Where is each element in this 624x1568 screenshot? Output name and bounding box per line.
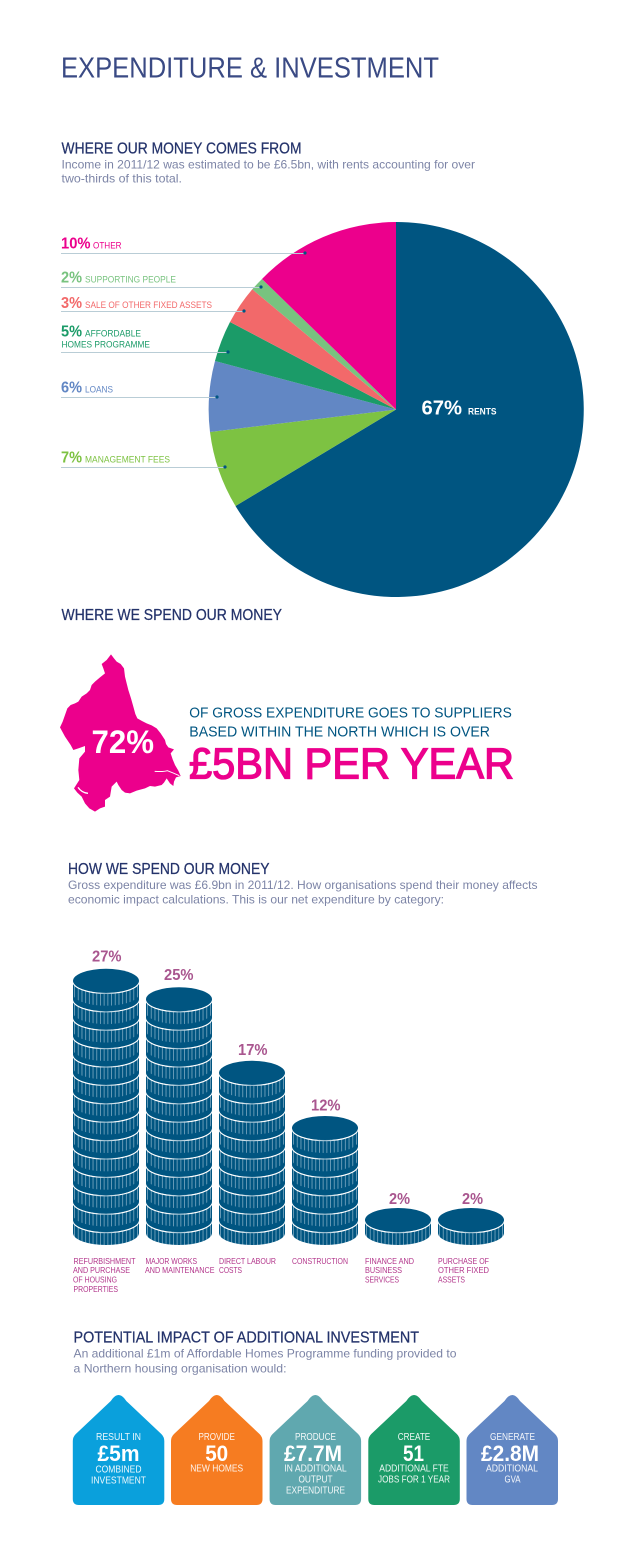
chart: coin stacks (73, 949, 504, 1245)
stat: 72%: 72% (92, 724, 154, 760)
category label: major works (145, 1256, 215, 1275)
category label: direct labour: COSTS (219, 1265, 242, 1275)
house: £2.8m additional GVA: GENERATE (490, 1432, 535, 1443)
pie label: management fees: MANAGEMENT FEES (85, 455, 170, 466)
pie label: affordable homes programme: 5% (61, 324, 82, 341)
house: £7.7m output expenditure: EXPENDITURE (286, 1486, 345, 1497)
text block: gross expenditure intro (68, 878, 538, 906)
category label: major works: AND MAINTENANCE (145, 1265, 215, 1275)
category label: fixed assets: OTHER FIXED (438, 1265, 489, 1275)
pie label: loans: LOANS (85, 384, 113, 396)
category label: fixed assets: PURCHASE OF (438, 1256, 489, 1266)
category label: fixed assets: ASSETS (438, 1274, 465, 1284)
coin stack: finance 2%: 2% (389, 1191, 410, 1208)
house: £2.8m additional GVA (466, 1395, 558, 1505)
coin stack: refurbishment 27% (73, 949, 139, 1245)
house: £2.8m additional GVA: £2.8M (481, 1441, 539, 1466)
coin stack: fixed assets 2% (438, 1191, 504, 1245)
coin stack: construction 12% (292, 1098, 358, 1245)
text block: additional funding intro: a Northern housing organisation would: (74, 1361, 286, 1375)
house: 51 additional FTE jobs: 51 (403, 1441, 424, 1466)
callout: suppliers in the north (189, 705, 514, 788)
map of the north with 72% (60, 654, 181, 812)
wedge: management fees 7% (210, 410, 396, 506)
wedge: affordable homes programme 5% (215, 322, 396, 410)
text block: income intro (62, 157, 475, 186)
pie label: loans: 6% (61, 380, 82, 396)
category label: major works: MAJOR WORKS (146, 1256, 197, 1266)
house: £2.8m additional GVA: GVA (504, 1475, 521, 1486)
wedge: other 10% (262, 222, 396, 410)
text block: additional funding intro (74, 1346, 457, 1375)
house: £7.7m output expenditure: IN ADDITIONAL (284, 1464, 347, 1475)
text block: income intro: Income in 2011/12 was estimated to be £6.5bn, with rents accounting for over (62, 157, 475, 171)
label: 67% rents: 67% (422, 398, 462, 420)
house: 50 new homes: NEW HOMES (190, 1464, 243, 1475)
label: 67% rents: RENTS (468, 406, 496, 418)
text block: gross expenditure intro: economic impact calculations. This is our net expenditure by category: (68, 892, 444, 906)
pie label: sale of other fixed assets: SALE OF OTHER FIXED ASSETS (85, 300, 212, 311)
wedge: loans 6% (209, 361, 396, 432)
category label: refurbishment: PROPERTIES (74, 1284, 118, 1294)
house: 50 new homes: PROVIDE (198, 1432, 235, 1443)
house: 50 new homes: 50 (205, 1441, 228, 1466)
coin stack: major works 25% (146, 967, 212, 1245)
text block: gross expenditure intro: Gross expenditure was £6.9bn in 2011/12. How organisations spend their money affects (68, 878, 538, 892)
pie label: affordable homes programme: HOMES PROGRAMME (62, 340, 150, 351)
pie label: sale of other fixed assets: 3% (61, 295, 82, 312)
pie label: affordable homes programme: AFFORDABLE (85, 329, 141, 340)
category label: direct labour: DIRECT LABOUR (219, 1256, 276, 1266)
pie chart: income sources (209, 222, 584, 597)
heading: where we spend our money: WHERE WE SPEND OUR MONEY (62, 607, 282, 624)
pie label: other (61, 236, 307, 255)
category label: finance: FINANCE AND (365, 1256, 414, 1266)
pie label: management fees (61, 450, 227, 469)
heading: how we spend our money: HOW WE SPEND OUR MONEY (68, 861, 270, 878)
house: 51 additional FTE jobs: JOBS FOR 1 YEAR (378, 1475, 450, 1486)
category label: refurbishment (73, 1256, 136, 1294)
category label: construction: CONSTRUCTION (292, 1256, 348, 1266)
pie label: supporting people: 2% (61, 270, 82, 287)
callout: suppliers in the north: BASED WITHIN THE NORTH WHICH IS OVER (189, 724, 490, 741)
house: 51 additional FTE jobs: ADDITIONAL FTE (379, 1464, 449, 1475)
house: £2.8m additional GVA: ADDITIONAL (486, 1464, 538, 1475)
heading: where our money comes from: WHERE OUR MONEY COMES FROM (62, 140, 302, 158)
category label: direct labour (219, 1256, 276, 1275)
heading: potential impact: POTENTIAL IMPACT OF ADDITIONAL INVESTMENT (74, 1329, 419, 1346)
category label: fixed assets (438, 1256, 489, 1284)
wedge: rents 67% (236, 222, 584, 597)
coin stack: fixed assets 2%: 2% (462, 1191, 483, 1208)
pie label: management fees: 7% (61, 450, 82, 467)
house: £7.7m output expenditure: OUTPUT (298, 1475, 332, 1486)
house: £5m combined investment: £5m (98, 1441, 140, 1466)
text block: income intro: two-thirds of this total. (62, 172, 182, 186)
house: £7.7m output expenditure: PRODUCE (295, 1432, 336, 1443)
pie label: supporting people: SUPPORTING PEOPLE (85, 275, 176, 286)
stat: £5bn per year: £5BN PER YEAR (189, 739, 514, 788)
category label: finance: SERVICES (365, 1274, 399, 1284)
house: £5m combined investment (73, 1395, 164, 1505)
coin stack: construction 12%: 12% (311, 1098, 340, 1114)
category label: refurbishment: AND PURCHASE (73, 1265, 130, 1275)
category label: finance: BUSINESS (365, 1265, 402, 1275)
house: 51 additional FTE jobs: CREATE (398, 1432, 431, 1443)
category label: finance (365, 1256, 414, 1284)
pie label: sale of other fixed assets (61, 295, 246, 313)
house: 50 new homes (171, 1395, 262, 1505)
pie label: other: OTHER (93, 240, 122, 252)
coin stack: refurbishment 27%: 27% (92, 949, 122, 966)
callout: suppliers in the north: OF GROSS EXPENDITURE GOES TO SUPPLIERS (189, 705, 512, 722)
house: £7.7m output expenditure: £7.7M (284, 1441, 342, 1466)
icon: northern England map (60, 654, 181, 812)
pie label: affordable homes programme (61, 324, 230, 354)
house: £5m combined investment: COMBINED (96, 1465, 142, 1476)
house: 51 additional FTE jobs (368, 1395, 460, 1505)
coin stack: direct labour 17% (219, 1042, 285, 1245)
wedge: supporting people 2% (252, 279, 396, 410)
house: £5m combined investment: INVESTMENT (91, 1476, 146, 1487)
coin stack: major works 25%: 25% (164, 967, 194, 984)
wedge: sale of other fixed assets 3% (230, 289, 396, 410)
title: EXPENDITURE & INVESTMENT (61, 52, 439, 84)
pie label: supporting people (61, 270, 263, 289)
house: £5m combined investment: RESULT IN (96, 1432, 141, 1443)
coin stack: finance 2% (365, 1191, 431, 1245)
label: 67% rents (422, 398, 496, 420)
category label: refurbishment: OF HOUSING (73, 1274, 117, 1284)
coin stack: direct labour 17%: 17% (238, 1042, 268, 1059)
pie label: other: 10% (61, 236, 91, 252)
house: £7.7m output expenditure (270, 1395, 361, 1505)
text block: additional funding intro: An additional £1m of Affordable Homes Programme funding provided to (74, 1346, 457, 1360)
pie label: loans (61, 380, 219, 399)
category label: refurbishment: REFURBISHMENT (74, 1256, 136, 1266)
